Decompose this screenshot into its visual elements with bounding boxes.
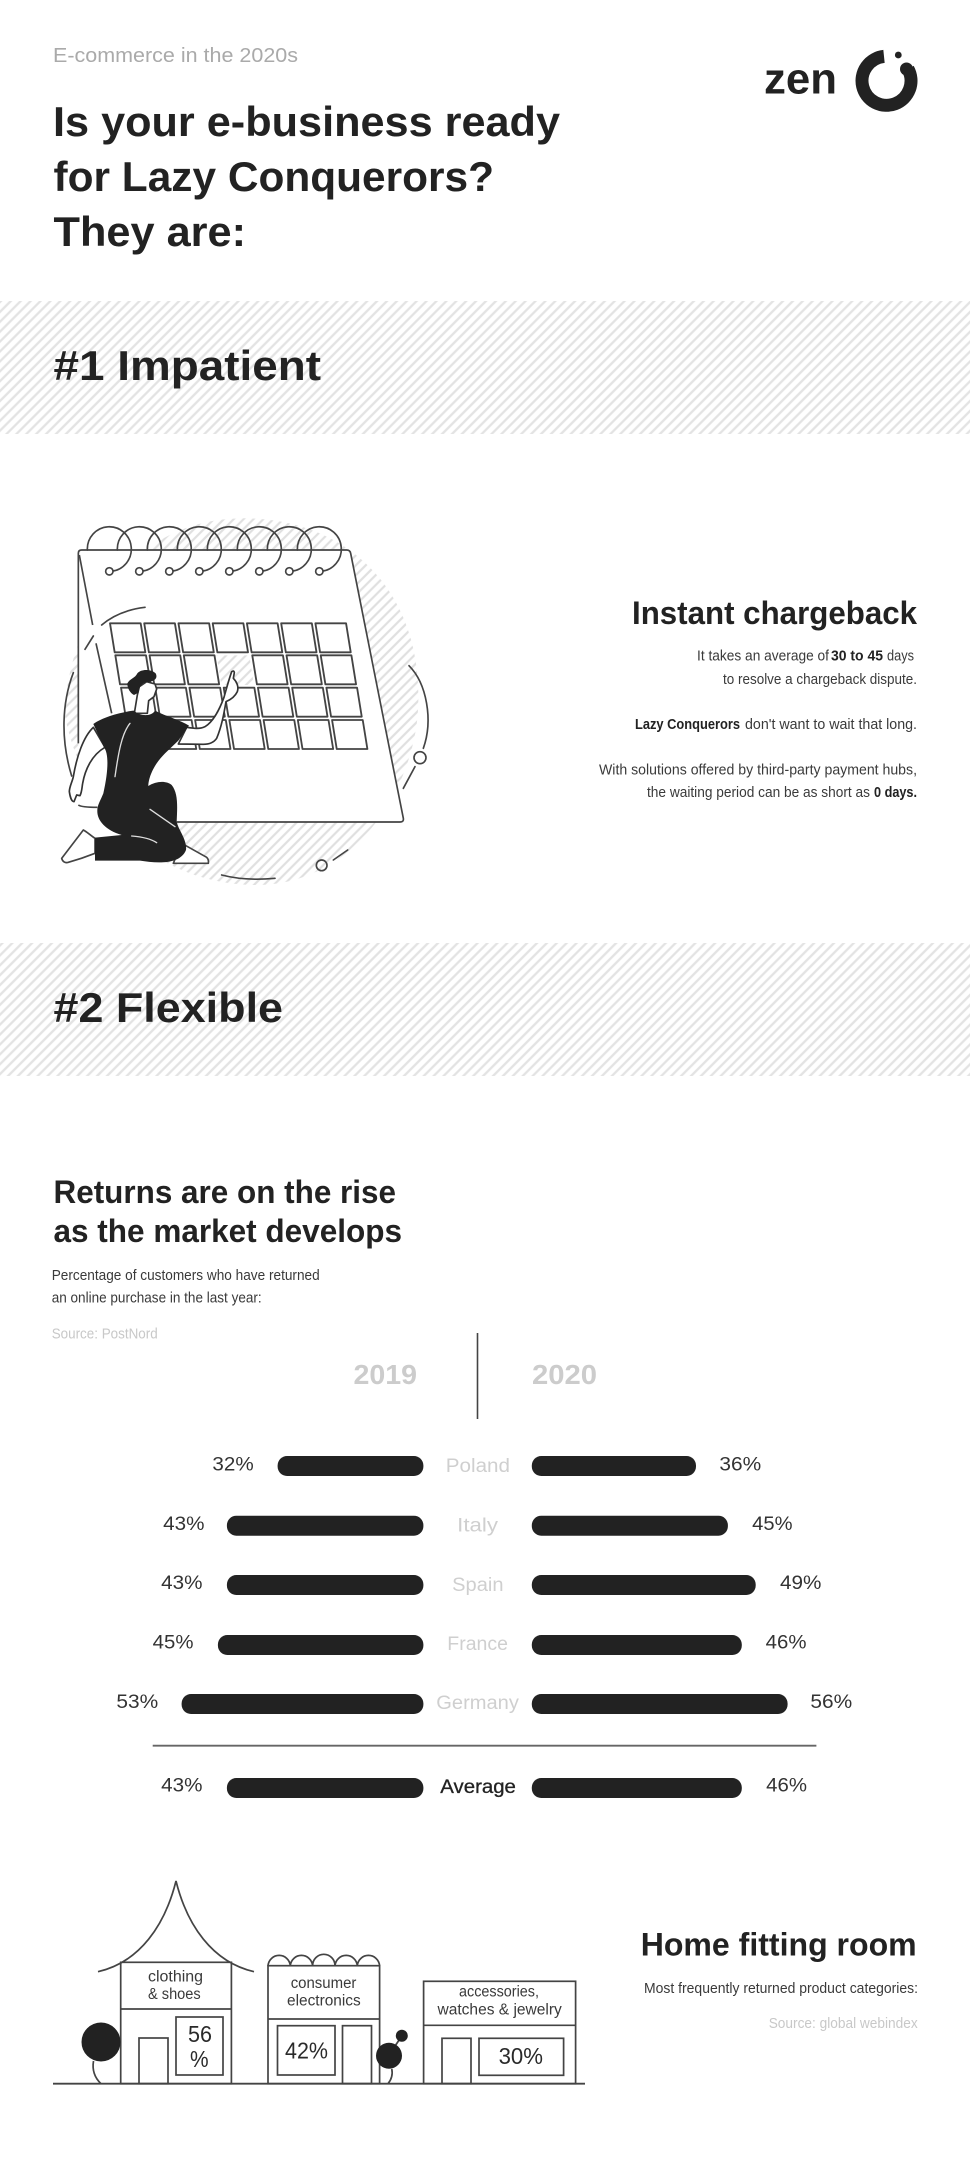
- shop: consumer electronics: 42%: [285, 2038, 328, 2064]
- orbit arcs and dots: [64, 607, 428, 879]
- paragraph three: With solutions offered by third-party payment hubs,: [599, 763, 917, 779]
- row: Average: [161, 1776, 807, 1798]
- row: France: 46%: [766, 1633, 807, 1654]
- row: Poland: 36%: [719, 1455, 761, 1476]
- shop: accessories, watches and jewelry: accessories,: [459, 1984, 539, 2001]
- heading: returns: Returns are on the rise: [54, 1174, 396, 1210]
- shop: accessories, watches and jewelry: 30%: [499, 2043, 543, 2069]
- left arm: [69, 727, 105, 802]
- raised arm: [178, 671, 238, 744]
- description text: an online purchase in the last year:: [52, 1291, 262, 1307]
- paragraph one: to resolve a chargeback dispute.: [723, 672, 917, 688]
- shop: accessories, watches and jewelry: [424, 1981, 576, 2084]
- row: France: 45%: [153, 1633, 194, 1654]
- source: PostNord: Source: PostNord: [52, 1327, 158, 1343]
- row: Average: Average: [440, 1777, 516, 1798]
- heading: Home fitting room: [641, 1927, 917, 1963]
- shop: clothing and shoes: clothing: [148, 1969, 203, 1986]
- title: for Lazy Conquerors?: [54, 153, 494, 200]
- row: Germany: 56%: [810, 1692, 852, 1713]
- row: Average: 43%: [161, 1776, 203, 1797]
- title: Is your e-business ready: [53, 98, 561, 145]
- text block: home fitting room: [641, 1927, 918, 2032]
- logo: zen: zen: [764, 54, 837, 103]
- heading: returns: as the market develops: [54, 1213, 402, 1249]
- year headers: 2020: [532, 1359, 597, 1390]
- row: Italy: 45%: [752, 1514, 793, 1535]
- paragraph two: [635, 717, 917, 733]
- paragraph one: [697, 649, 917, 688]
- eyebrow text: E-commerce in the 2020s: [53, 45, 298, 67]
- row: Germany: [116, 1692, 852, 1714]
- paragraph one: 30 to 45: [831, 649, 883, 665]
- row: Poland: Poland: [446, 1456, 510, 1477]
- paragraph three: the waiting period can be as short as: [647, 785, 870, 801]
- band: #1 Impatient: [0, 301, 970, 434]
- row: Spain: [161, 1573, 822, 1596]
- title: They are:: [54, 208, 246, 255]
- paragraph three: [599, 763, 917, 801]
- calendar board: [78, 550, 403, 822]
- row: Spain: Spain: [452, 1575, 504, 1596]
- shop: accessories, watches and jewelry: watches & jewelry: [436, 2001, 562, 2018]
- shop: clothing and shoes: 56: [188, 2021, 212, 2047]
- paragraph one: days: [887, 649, 914, 665]
- row: France: [153, 1633, 807, 1655]
- paragraph two: Lazy Conquerors: [635, 717, 740, 733]
- butterfly bar chart: [116, 1333, 852, 1798]
- hatched blob: [65, 518, 418, 885]
- row: Italy: Italy: [457, 1516, 499, 1537]
- paragraph three: 0 days.: [874, 785, 917, 801]
- illustration: three shops: [53, 1881, 585, 2084]
- year headers: [354, 1333, 597, 1419]
- paragraph two: don't want to wait that long.: [745, 717, 917, 733]
- shoes: [62, 830, 95, 863]
- source: Source: global webindex: [769, 2016, 918, 2032]
- tree: right: [376, 2030, 408, 2084]
- year headers: 2019: [354, 1359, 417, 1390]
- row: Spain: 49%: [780, 1573, 822, 1594]
- person: [62, 670, 238, 863]
- row: Poland: [212, 1455, 761, 1477]
- face: [134, 682, 157, 713]
- heading: returns: [54, 1174, 402, 1249]
- hair: [127, 670, 156, 695]
- band: #1 Impatient: #1 Impatient: [54, 342, 321, 389]
- row: Italy: [163, 1514, 793, 1537]
- calendar grid: [110, 623, 367, 749]
- shop: clothing and shoes: & shoes: [148, 1986, 201, 2003]
- band: #2 Flexible: [0, 943, 970, 1076]
- description text: [52, 1268, 320, 1307]
- illustration: person pointing at calendar: [62, 518, 428, 885]
- description: Most frequently returned product categories:: [644, 1981, 918, 1997]
- row: Spain: 43%: [161, 1573, 203, 1594]
- title: [53, 98, 561, 255]
- heading: Instant chargeback: [632, 595, 917, 631]
- paragraph one: It takes an average of: [697, 649, 830, 665]
- shop: consumer electronics: [268, 1954, 380, 2084]
- row: Poland: 32%: [212, 1455, 254, 1476]
- row: Germany: 53%: [116, 1692, 158, 1713]
- description text: Percentage of customers who have returned: [52, 1268, 320, 1284]
- band: #2 Flexible: #2 Flexible: [54, 984, 283, 1031]
- logo: zen: [764, 52, 913, 105]
- row: Germany: Germany: [436, 1693, 519, 1714]
- shop: clothing and shoes: [98, 1881, 254, 2084]
- row: France: France: [447, 1634, 508, 1655]
- text block: instant chargeback: [599, 595, 917, 801]
- clothing: [93, 711, 189, 862]
- row: Italy: 43%: [163, 1514, 205, 1535]
- calendar rings: [87, 527, 341, 575]
- clothing highlights: [115, 723, 175, 843]
- tree: left: [82, 2022, 120, 2084]
- shop: consumer electronics: electronics: [287, 1992, 361, 2009]
- row: Average: 46%: [766, 1776, 807, 1797]
- shop: clothing and shoes: %: [190, 2046, 209, 2072]
- shop: consumer electronics: consumer: [291, 1975, 356, 1992]
